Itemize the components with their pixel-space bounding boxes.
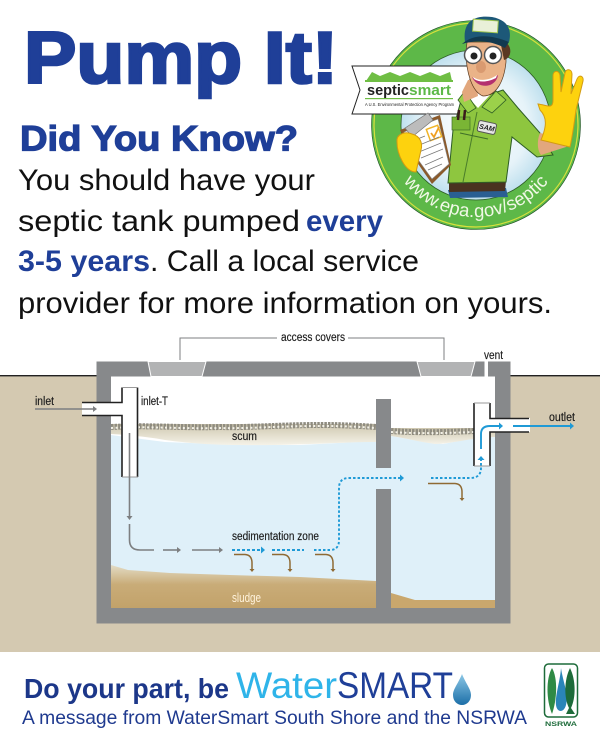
- access covers leader: [180, 338, 444, 360]
- septicsmart mascot badge: [351, 16, 584, 230]
- gray flow arrows: [35, 409, 221, 550]
- access cover left: [148, 362, 206, 376]
- septicsmart mascot badge: www.epa.gov/septic: [405, 175, 547, 221]
- tank shell: [96, 362, 510, 624]
- outlet T pipe: [474, 403, 530, 466]
- diagram labels: scum: [232, 431, 257, 443]
- NSRWA logo: [544, 664, 578, 728]
- sediment arrows: [234, 484, 462, 570]
- mascot: clipboard and glove: [397, 113, 451, 184]
- septicsmart banner: A U.S. Environmental Protection Agency Program: [365, 102, 454, 107]
- access cover right: [417, 362, 475, 376]
- heading: did you know: Did You Know?: [20, 120, 298, 158]
- text block: pumping advice: [18, 164, 552, 320]
- footer slogan: [24, 665, 471, 706]
- text block: pumping advice: septic tank pumped: [18, 205, 300, 238]
- septicsmart banner: septic: [367, 83, 409, 99]
- title: Pump It!: [24, 18, 338, 99]
- diagram labels: access covers: [281, 332, 345, 344]
- text block: pumping advice: every: [306, 205, 383, 238]
- blue flow arrows: [232, 426, 572, 550]
- vent gap: [484, 361, 488, 377]
- diagram labels: sludge: [232, 591, 261, 605]
- footer message: A message from WaterSmart South Shore and the NSRWA: [22, 707, 527, 729]
- diagram labels: vent: [484, 350, 504, 362]
- diagram labels: inlet: [35, 396, 55, 408]
- badge ring: [372, 20, 580, 230]
- diagram labels: sedimentation zone: [232, 531, 319, 543]
- mascot: body: SAM: [478, 123, 495, 134]
- badge url: [401, 178, 551, 217]
- footer slogan: Water: [236, 665, 337, 706]
- septicsmart banner: [352, 66, 470, 114]
- text block: pumping advice: 3-5 years: [18, 245, 150, 278]
- baffle wall: [376, 399, 391, 609]
- water: [111, 435, 495, 608]
- mascot: waving yellow glove: [538, 70, 583, 147]
- septic tank diagram: [0, 332, 600, 652]
- text block: pumping advice: You should have your: [18, 164, 315, 197]
- mascot: head and cap: [462, 17, 510, 102]
- ground: [0, 375, 600, 652]
- septicsmart banner: smart: [409, 83, 451, 99]
- NSRWA logo: NSRWA: [545, 722, 578, 728]
- sludge layer: [111, 565, 376, 608]
- tank interior air: [111, 376, 495, 608]
- icon: water drop: [453, 674, 471, 705]
- text block: pumping advice: . Call a local service: [150, 245, 419, 278]
- mascot: body: [448, 90, 571, 198]
- diagram labels: inlet-T: [141, 396, 168, 408]
- footer slogan: SMART: [337, 665, 453, 706]
- diagram labels: [35, 332, 576, 605]
- text block: pumping advice: provider for more information on yours.: [18, 287, 552, 320]
- inlet T pipe: [82, 387, 138, 477]
- scum layer: [111, 424, 495, 445]
- footer slogan: Do your part, be: [24, 673, 229, 704]
- diagram labels: outlet: [549, 412, 576, 424]
